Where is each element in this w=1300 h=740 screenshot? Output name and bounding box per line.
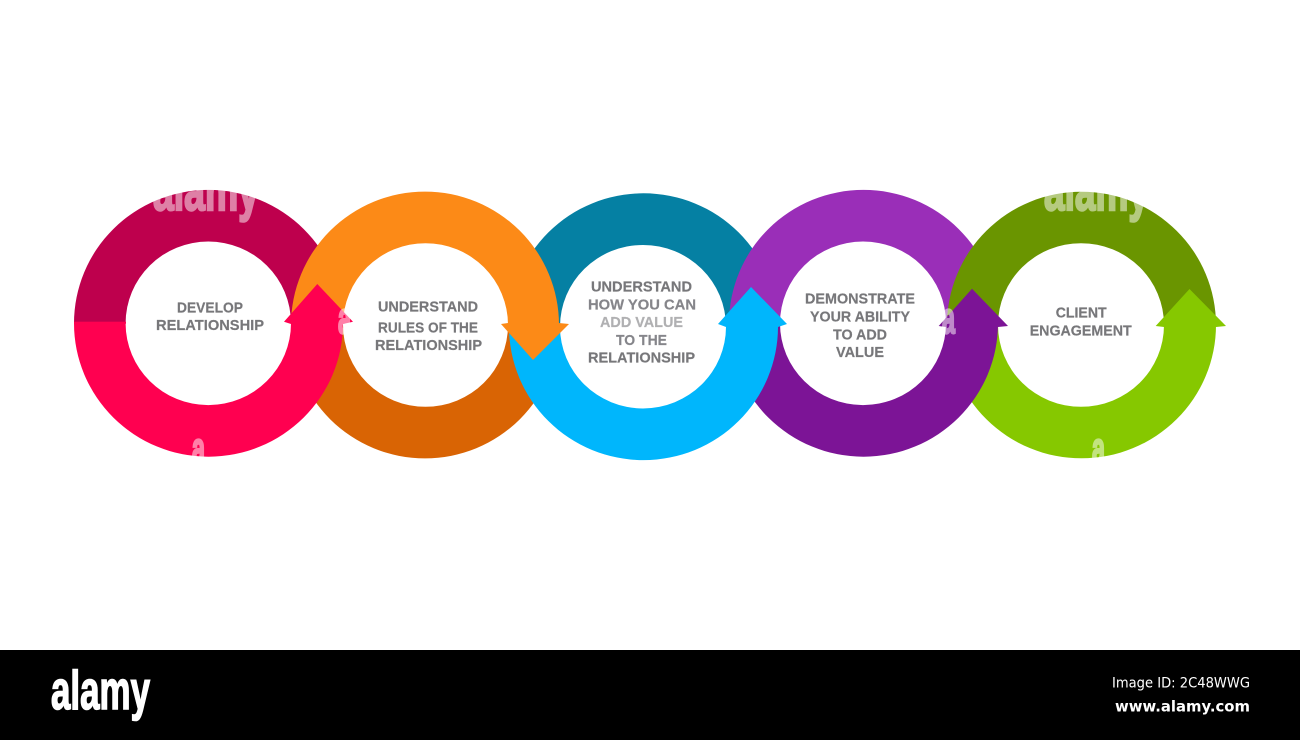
ring 3 top half: teal [509,193,778,327]
step 1 label [156,299,264,334]
watermark overlays: a [1092,424,1105,473]
watermark overlays: a [192,424,205,473]
step 2 label: UNDERSTAND [378,298,478,315]
step 3 label: TO THE [616,332,667,349]
watermark overlays: a [338,294,351,343]
step 4 label: VALUE [836,344,884,361]
ring 2 bottom half: dark orange [291,325,559,458]
step 5 label [1030,304,1132,339]
step 4 label: YOUR ABILITY [810,308,910,325]
ring 4 top half: purple [729,190,998,323]
watermark overlays: alamy [153,159,259,222]
step 5 label: ENGAGEMENT [1030,322,1132,339]
ring 5 top half: olive green [947,192,1216,325]
step 3 label: ADD VALUE [600,314,683,331]
step 5 label: CLIENT [1056,304,1107,321]
ring 1 top half: crimson [74,190,343,323]
ring 3 bottom half with arrow: bright blue [509,287,787,460]
footer logo: alamy [51,659,150,721]
ring 4 bottom half with arrow: dark purple [729,289,1008,457]
step 3 label [588,278,696,366]
arrow head: green [1156,289,1226,327]
step 1 label: DEVELOP [177,299,243,316]
footer url: www.alamy.com [1115,698,1250,716]
step 1 label: RELATIONSHIP [156,317,264,334]
step 2 label: RULES OF THE [378,319,478,336]
step 2 label [375,298,482,354]
watermark overlays [153,159,1149,473]
step 4 label: TO ADD [833,326,887,343]
step 4 label: DEMONSTRATE [805,290,915,307]
ring 1 bottom half with arrow: bright red [74,284,353,457]
step 4 label [805,290,915,361]
watermark overlays: alamy [1044,159,1149,222]
step 3 label: HOW YOU CAN [588,296,696,313]
ring 5 bottom half: bright green [947,325,1216,458]
watermark overlays: a [942,294,955,343]
footer image id: Image ID: 2C48WWG [1112,676,1250,692]
step 2 label: RELATIONSHIP [375,337,482,354]
step 3 label: UNDERSTAND [591,278,692,295]
ring 2 top half with arrow: orange [291,192,569,360]
footer bar [0,650,1300,740]
step 3 label: RELATIONSHIP [588,349,695,366]
